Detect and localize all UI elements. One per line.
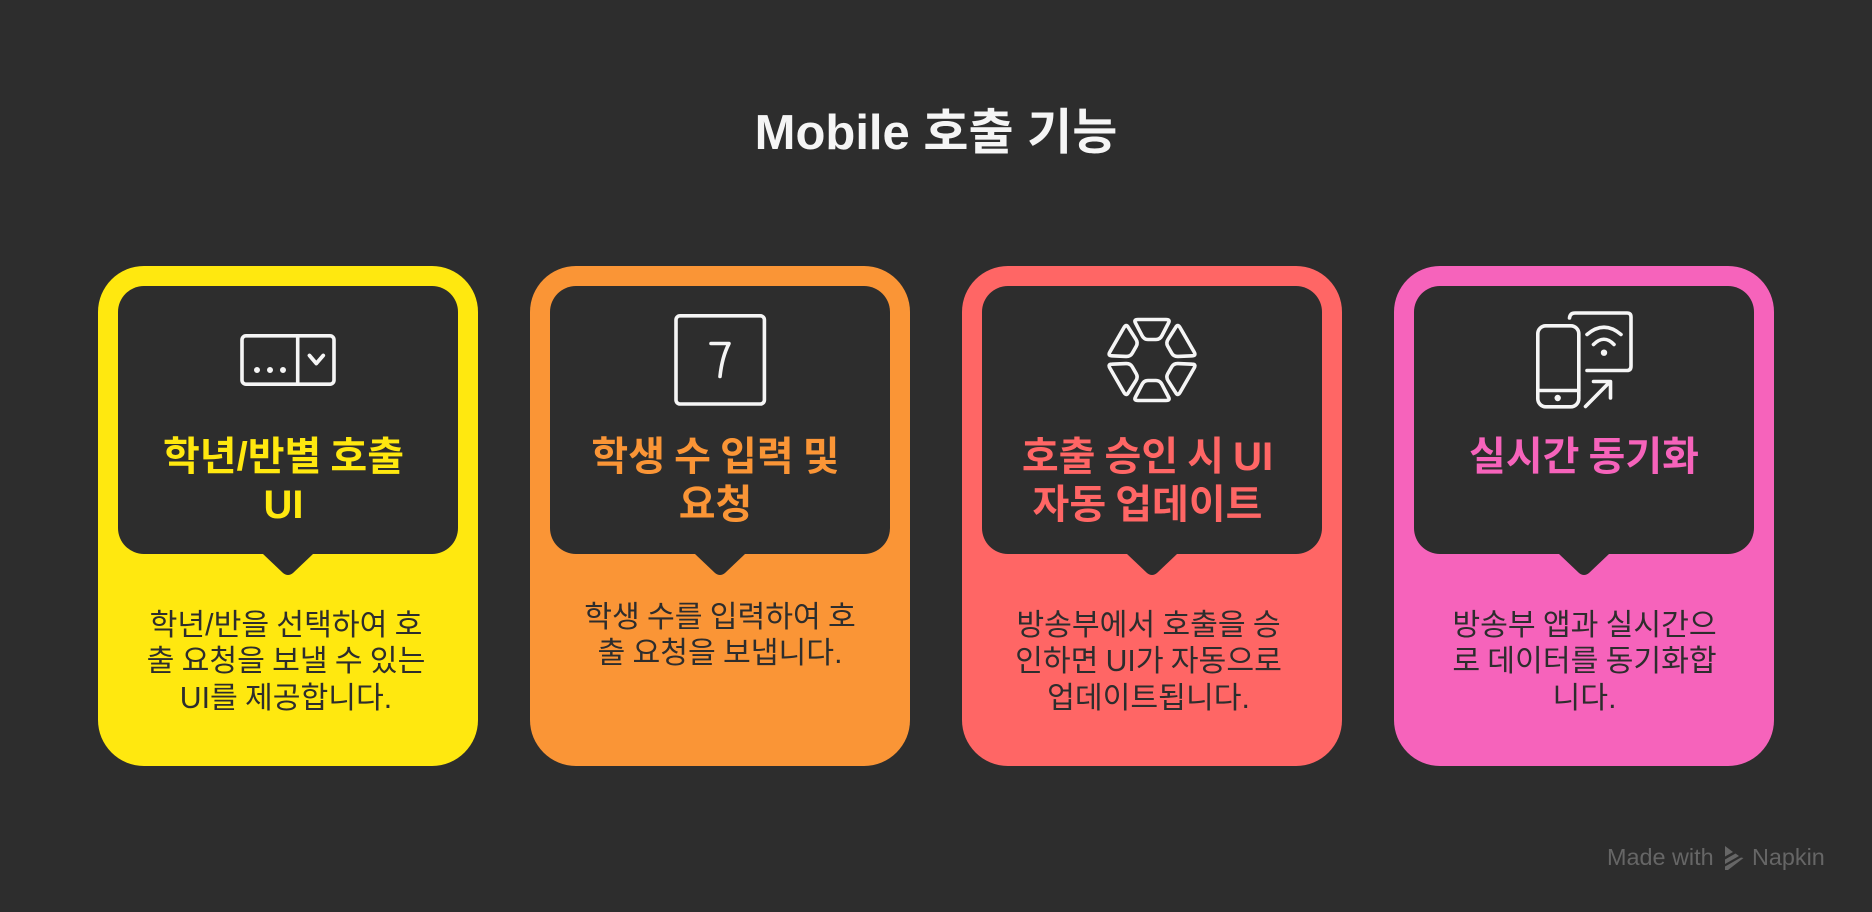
panel: student count input [530,266,910,766]
description [1015,608,1282,715]
panel: grade/class call UI [98,266,478,766]
callout pointer [695,554,745,575]
description: 출 요청을 보낼 수 있는 [147,645,425,678]
description: 업데이트됩니다. [1047,682,1250,715]
description: 방송부에서 호출을 승 [1016,608,1281,642]
description: UI를 제공합니다. [180,682,392,715]
heading: 호출 승인 시 UI [1022,434,1273,478]
callout pointer [263,554,313,575]
description: 출 요청을 보냅니다. [598,637,842,670]
heading: 자동 업데이트 [1033,482,1262,526]
heading: UI [264,482,304,526]
footer: Made with: Made with [1607,844,1714,870]
callout pointer [1127,554,1177,575]
callout: heading panel [1414,286,1754,554]
heading: 요청 [679,482,752,526]
heading: 학생 수 입력 및 [591,434,840,478]
heading: 실시간 동기화 [1469,434,1699,478]
icon: Napkin logo [1725,846,1744,870]
description: 로 데이터를 동기화합 [1452,645,1717,678]
description [584,600,856,670]
heading: 학년/반별 호출 [163,434,404,478]
title: Mobile 호출 기능 [755,106,1117,160]
description: 인하면 UI가 자동으로 [1015,645,1282,678]
footer: Napkin: Napkin [1752,844,1825,870]
panel: realtime sync [1394,266,1774,766]
description: 학생 수를 입력하여 호 [584,600,856,634]
panel: auto UI update [962,266,1342,766]
description: 니다. [1553,682,1616,715]
description [147,608,425,715]
heading [1022,434,1273,526]
callout: heading panel [118,286,458,554]
description [1452,608,1717,715]
description: 방송부 앱과 실시간으 [1452,608,1717,642]
callout: heading panel [982,286,1322,554]
callout pointer [1559,554,1609,575]
heading [591,434,840,526]
callout: heading panel [550,286,890,554]
description: 학년/반을 선택하여 호 [150,608,422,642]
heading [163,434,404,526]
